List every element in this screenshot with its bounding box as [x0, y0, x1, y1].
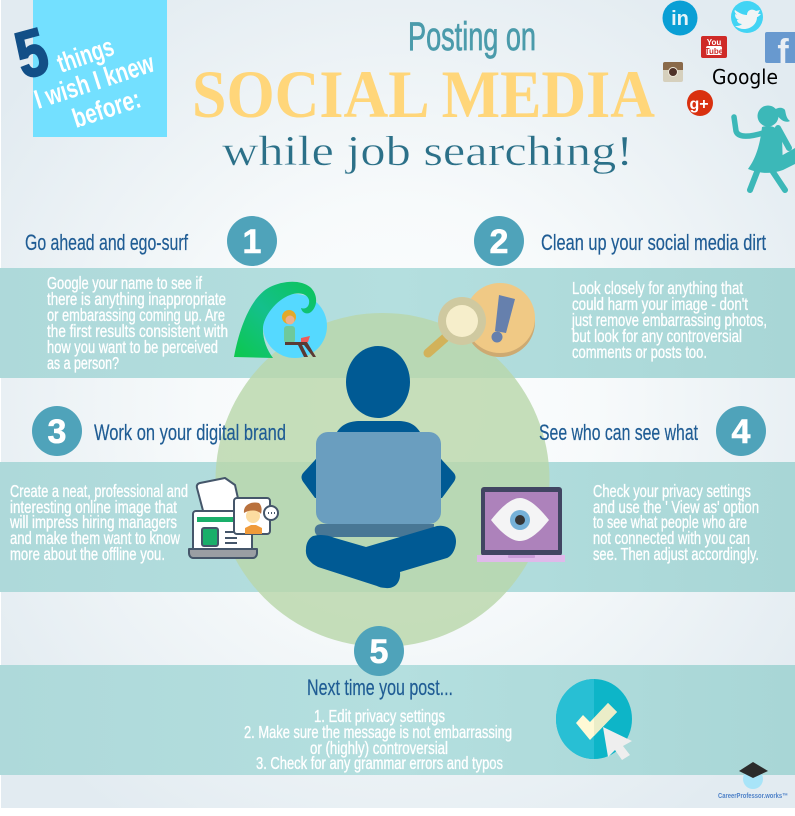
- step 1 text: there is anything inappropriate: [47, 289, 226, 309]
- number badge 1: 1: [243, 223, 261, 261]
- step 3 text: and make them want to know: [10, 528, 180, 548]
- number badge 4: [716, 406, 766, 456]
- central figure with laptop: [302, 346, 456, 588]
- icon: laptop with profile card: [189, 478, 278, 558]
- badge: 5 things I wish I knew before: I wish I knew: [31, 48, 158, 115]
- laptop base: [315, 524, 434, 537]
- step 1 heading: Go ahead and ego-surf: [25, 230, 189, 255]
- torso and arms: [302, 421, 456, 498]
- step 5 checklist: 3. Check for any grammar errors and typos: [256, 753, 503, 773]
- number badge 2: 2: [490, 223, 508, 261]
- step 4 heading: [539, 406, 766, 456]
- step 1 text: Google your name to see if: [47, 273, 202, 293]
- step 3 heading: [32, 406, 286, 456]
- step 1 text: the first results consistent with: [47, 321, 228, 341]
- number badge 1: [227, 216, 277, 266]
- badge: 5 things I wish I knew before: things: [53, 31, 118, 79]
- step 3 heading: Work on your digital brand: [94, 420, 286, 445]
- head: [346, 346, 410, 418]
- icon: Twitter: [731, 1, 763, 33]
- icon: Facebook: f: [777, 33, 789, 71]
- title: [192, 15, 655, 175]
- laptop screen: [316, 432, 441, 524]
- badge: 5 things I wish I knew before: [7, 0, 167, 137]
- icon: magnifier and exclamation mark: [428, 283, 535, 357]
- step 5 checklist: 1. Edit privacy settings: [314, 706, 445, 726]
- title: Posting on: [408, 15, 536, 59]
- icon: YouTube: You: [707, 38, 721, 47]
- step 5 checklist: [244, 706, 512, 773]
- icon: YouTube: Tube: [705, 47, 724, 56]
- social media icons: [662, 0, 795, 116]
- icon: laptop with eye: [477, 487, 565, 562]
- step 1 text: or embarassing coming up. Are: [47, 305, 225, 325]
- step 3 text: will impress hiring managers: [9, 512, 177, 532]
- Google wordmark: Google: [712, 65, 778, 89]
- step 3 text: Create a neat, professional and: [10, 481, 188, 501]
- icon: woman with briefcase: [734, 106, 795, 190]
- logo: CareerProfessor.works: [718, 762, 788, 800]
- number badge 5: 5: [370, 633, 388, 671]
- number badge 3: 3: [48, 413, 66, 451]
- legs: [306, 526, 456, 588]
- number badge 2: [474, 216, 524, 266]
- step 5 checklist: or (highly) controversial: [310, 738, 448, 758]
- step 3 text: [9, 481, 188, 564]
- step 2 text: comments or posts too.: [572, 342, 707, 362]
- step 2 text: but look for any controversial: [572, 326, 742, 346]
- step 1 text: [47, 273, 228, 373]
- step 3 text: interesting online image that: [10, 497, 177, 517]
- number badge 4: 4: [732, 413, 751, 451]
- icon: LinkedIn: in: [671, 8, 689, 30]
- step 1 text: as a person?: [47, 353, 119, 373]
- icon: person surfing under a wave: [234, 282, 327, 358]
- step 5 checklist: 2. Make sure the message is not embarrassing: [244, 722, 512, 742]
- step 4 heading: See who can see what: [539, 420, 698, 445]
- icon: Google Plus: g+: [689, 96, 709, 113]
- step 2 heading: [474, 216, 766, 266]
- badge: 5 things I wish I knew before: before:: [69, 84, 144, 134]
- step 2 text: Look closely for anything that: [572, 278, 743, 298]
- step 4 text: [593, 481, 759, 564]
- icon: YouTube: [701, 36, 727, 58]
- title: SOCIAL MEDIA: [192, 56, 655, 132]
- badge: 5 things I wish I knew before: 5: [7, 13, 56, 93]
- number badge 3: [32, 406, 82, 456]
- number badge 5: [354, 626, 404, 676]
- icon: Instagram: [663, 62, 683, 82]
- step 1 text: how you want to be perceived: [47, 337, 218, 357]
- icon: check mark and cursor: [556, 679, 632, 760]
- title: while job searching!: [222, 129, 633, 175]
- step 3 text: more about the offline you.: [10, 544, 165, 564]
- step 5 heading: Next time you post...: [307, 675, 453, 700]
- step 2 text: [571, 278, 767, 362]
- step 1 heading: [25, 216, 277, 266]
